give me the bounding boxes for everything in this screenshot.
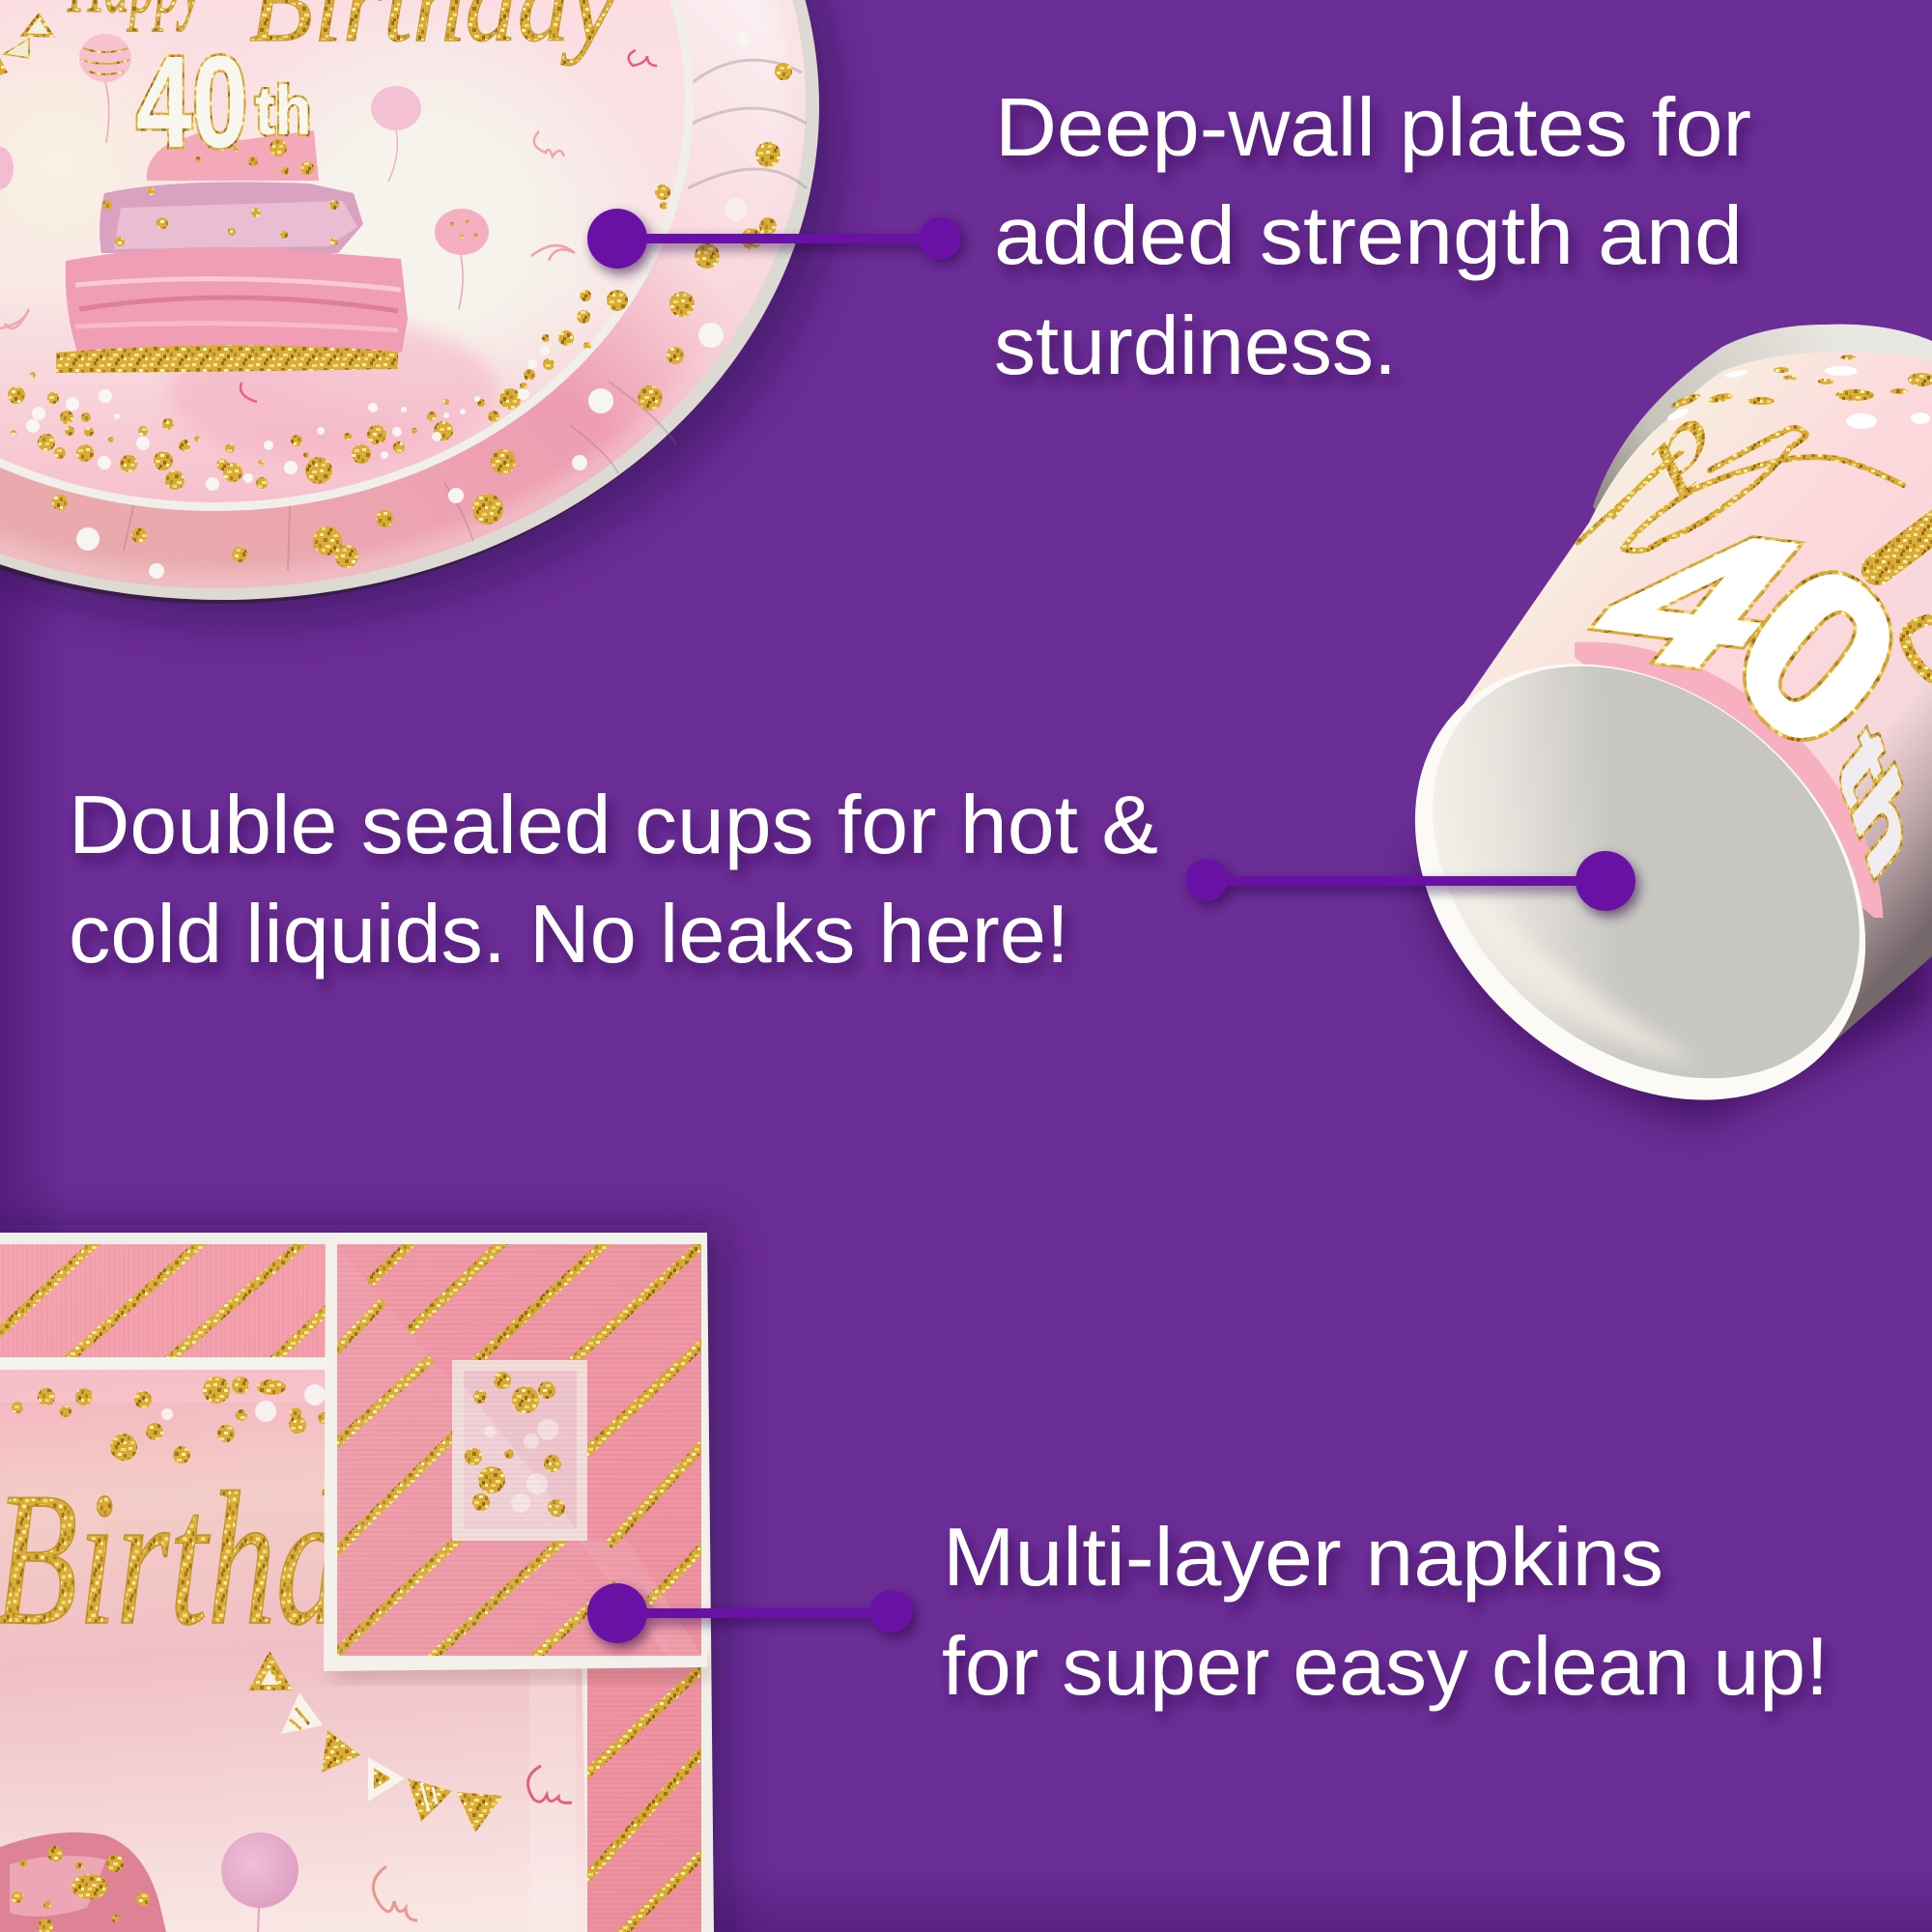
callout plates leader: [587, 209, 965, 274]
plate drop shadow: [0, 0, 840, 623]
cup base cream crescent: [1449, 840, 1700, 1063]
callout: plates: [587, 82, 1751, 392]
cup script letter: p: [1617, 389, 1731, 504]
cup digit 4: 4: [1547, 496, 1847, 704]
fold light triangle: [337, 1244, 676, 1656]
confetti curls: [0, 50, 657, 402]
napkin band border: [0, 1357, 328, 1370]
plate 40th label: th: [255, 73, 312, 150]
callout napkins text: for super easy clean up!: [942, 1621, 1829, 1713]
napkin fold panel: [324, 1233, 710, 1681]
well gold dots: [8, 185, 670, 490]
napkin confetti curls: [373, 1766, 572, 1920]
callout: cups: [69, 780, 1639, 980]
plate well: [0, 0, 696, 512]
callout napkins text: [942, 1512, 1829, 1713]
napkin sheet: [0, 1233, 714, 1932]
cup digit 4: [1586, 535, 1806, 670]
napkin cake: [0, 1833, 166, 1932]
fold gold stripes lower: [330, 1287, 647, 1659]
rim creases: [124, 382, 676, 570]
napkin bunting: [248, 1651, 502, 1833]
napkin front panel: [0, 1370, 587, 1932]
napkin confetti and script: [0, 1377, 474, 1665]
pink balloon: [371, 86, 421, 182]
callout plates text: Deep-wall plates for: [995, 82, 1751, 174]
cup flourish loops: [1577, 428, 1932, 681]
bunting: [0, 15, 52, 75]
cup ordinal th: th: [1824, 706, 1927, 898]
napkin ribbed texture: [0, 1233, 701, 1932]
napkin top stripe band: [0, 1241, 338, 1364]
cake top tier: [147, 130, 319, 181]
cake: [56, 130, 408, 373]
rim lighter outer band: [0, 0, 804, 585]
cup body: [1450, 352, 1932, 1049]
dotted balloon: [435, 209, 489, 309]
cup white dots: [1665, 366, 1930, 429]
napkin script heading: Birthday: [0, 1454, 474, 1665]
cake bottom tier: [66, 247, 408, 353]
callout cups leader: [1185, 851, 1639, 917]
fold under-shadow: [333, 1658, 710, 1681]
napkin balloon: [221, 1833, 298, 1932]
plate inner ring: [0, 0, 694, 511]
callout cups text: [69, 780, 1158, 980]
cup ordinal th: th: [1824, 706, 1927, 898]
striped balloon: [79, 34, 131, 143]
cup digit 4: 4: [1547, 496, 1847, 704]
panel: paper plate: [0, 0, 840, 623]
callout plates text: added strength and: [994, 190, 1743, 282]
callout napkins leader: [587, 1583, 917, 1649]
cake gold base: [56, 345, 398, 373]
left balloon: [0, 147, 14, 189]
cup graphics: [1575, 355, 1932, 918]
callout cups text: cold liquids. No leaks here!: [69, 889, 1069, 980]
well white dots: [26, 346, 550, 491]
cup rim: [1593, 325, 1932, 580]
napkin drop shadow: [0, 1225, 726, 1932]
cup drop shadow: [1420, 850, 1932, 1121]
cake glitter specks: [102, 139, 339, 246]
rim white dots: [76, 32, 752, 579]
callout plates text: sturdiness.: [994, 300, 1397, 392]
fold gold stripes upper: [357, 1238, 708, 1604]
cup 40th label: [1586, 535, 1905, 885]
plate script heading: [67, 0, 617, 66]
plate rim: [0, 0, 806, 588]
napkin right stripe column: [580, 1662, 710, 1932]
cup confetti dots: [1670, 355, 1932, 411]
balloons: [0, 34, 489, 309]
cup base floor: [1350, 582, 1932, 1162]
callout napkins text: Multi-layer napkins: [943, 1512, 1663, 1604]
napkin fold strip: [529, 1667, 576, 1932]
panel: napkin: [0, 1225, 726, 1932]
callout plates text: [994, 82, 1751, 392]
fold pink field: [337, 1244, 701, 1656]
callout: napkins: [587, 1512, 1829, 1713]
plate 40th label: 40: [136, 30, 248, 175]
fold border: [324, 1233, 707, 1671]
fold corner sheen: [580, 1541, 701, 1656]
plate 40th label: [136, 30, 312, 175]
plate outer edge: [0, 0, 819, 600]
rim gold dots: [52, 63, 792, 568]
plate dark under-edge: [0, 0, 815, 604]
callout cups text: Double sealed cups for hot &: [69, 780, 1158, 871]
cup base outer lip: [1328, 575, 1932, 1189]
cup pink band: [1575, 641, 1884, 918]
rim wrinkles: [676, 60, 807, 188]
fold window: [452, 1360, 587, 1541]
cake middle tier: [99, 182, 363, 253]
panel: paper cup: [1406, 325, 1932, 1136]
